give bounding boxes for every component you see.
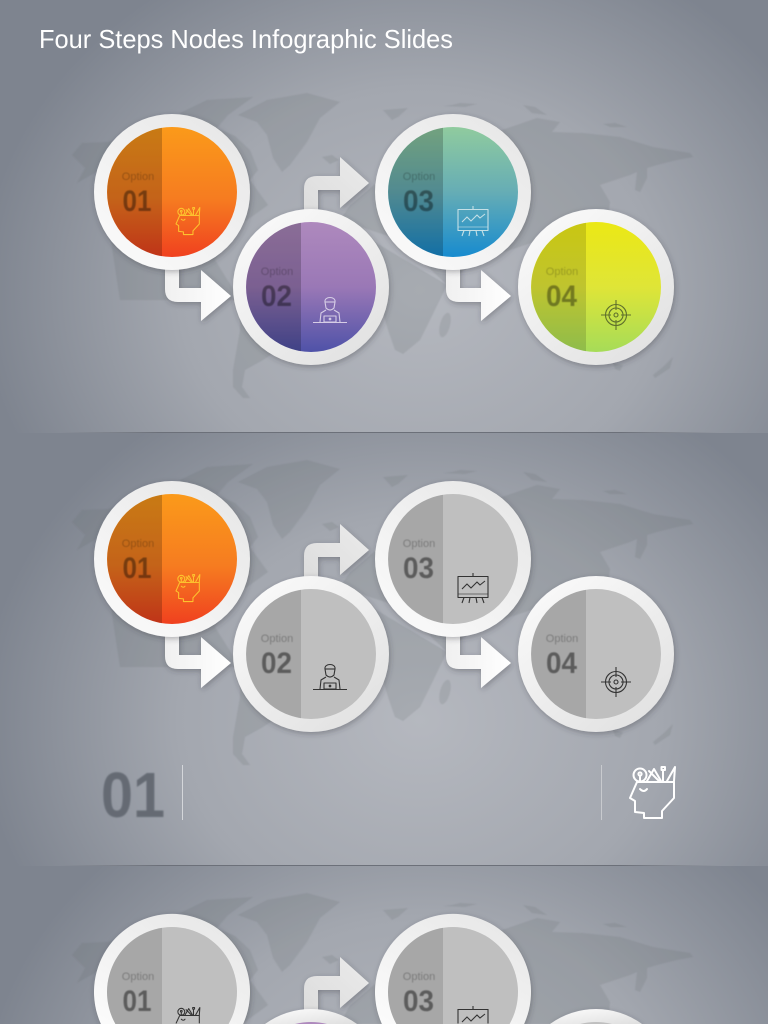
number: 04: 04 xyxy=(546,280,577,313)
arrow: step 2 to 3 xyxy=(304,157,369,215)
number: 01: 01 xyxy=(122,185,152,218)
node: option 01 xyxy=(94,481,250,637)
world map: slide 3 xyxy=(72,893,693,1024)
number: 01: 01 xyxy=(122,552,152,585)
slide 1: four step diagram xyxy=(94,114,674,365)
icon: presentation board xyxy=(458,206,488,236)
slide 3: four step diagram, step 2 highlighted xyxy=(94,914,642,1024)
number: 04: 04 xyxy=(546,647,577,680)
node: option 02 xyxy=(265,1009,357,1024)
slide 2: four step diagram, step 1 highlighted xyxy=(94,481,674,732)
icon: person at laptop xyxy=(313,664,347,690)
slide 3 background xyxy=(0,866,768,1024)
world map: slide 2 xyxy=(72,460,693,765)
arrow: step 1 to 2 xyxy=(165,262,231,321)
label: option 01: Option xyxy=(122,538,154,550)
arrow: step 3 to 4 xyxy=(446,262,511,321)
number: 03: 03 xyxy=(403,552,434,585)
node: option 04 xyxy=(550,1009,642,1024)
slide 1 background xyxy=(0,0,768,433)
label: option 01: Option xyxy=(122,971,154,983)
number: 02: 02 xyxy=(261,647,292,680)
label: option 02: Option xyxy=(261,266,293,278)
icon: head with tools xyxy=(176,208,200,235)
label: option 03: Option xyxy=(403,971,435,983)
label: option 01: Option xyxy=(122,171,154,183)
icon: presentation board xyxy=(458,573,488,603)
node: option 03 xyxy=(375,481,531,637)
world map: slide 1 xyxy=(72,93,693,398)
node: option 03 xyxy=(375,914,531,1024)
icon: head with tools xyxy=(176,575,200,602)
icon: target xyxy=(601,667,631,697)
number: 03: 03 xyxy=(403,985,434,1018)
label: option 02: Option xyxy=(261,633,293,645)
label: option 04: Option xyxy=(546,266,578,278)
node: option 01 xyxy=(94,914,250,1024)
icon: large head with tools xyxy=(630,767,675,818)
icon: presentation board xyxy=(458,1006,488,1024)
node: option 03 xyxy=(375,114,531,270)
number: 01: 01 xyxy=(122,985,152,1018)
title: Four Steps Nodes Infographic Slides xyxy=(39,24,453,54)
slide 2 background xyxy=(0,433,768,866)
node: option 01 xyxy=(94,114,250,270)
label: option 03: Option xyxy=(403,171,435,183)
arrow: step 1 to 2 xyxy=(165,629,231,688)
icon: head with tools xyxy=(176,1008,200,1023)
label: option 03: Option xyxy=(403,538,435,550)
node: option 02 xyxy=(233,576,389,732)
arrow: step 3 to 4 xyxy=(446,629,511,688)
number: 03: 03 xyxy=(403,185,434,218)
node: option 04 xyxy=(518,576,674,732)
label: option 04: Option xyxy=(546,633,578,645)
node: option 04 xyxy=(518,209,674,365)
icon: target xyxy=(601,300,631,330)
node: option 02 xyxy=(233,209,389,365)
arrow: step 2 to 3 xyxy=(304,524,369,582)
arrow: step 2 to 3 xyxy=(304,957,369,1015)
number: 02: 02 xyxy=(261,280,292,313)
icon: person at laptop xyxy=(313,298,347,322)
detail number: 01: 01 xyxy=(101,759,165,831)
